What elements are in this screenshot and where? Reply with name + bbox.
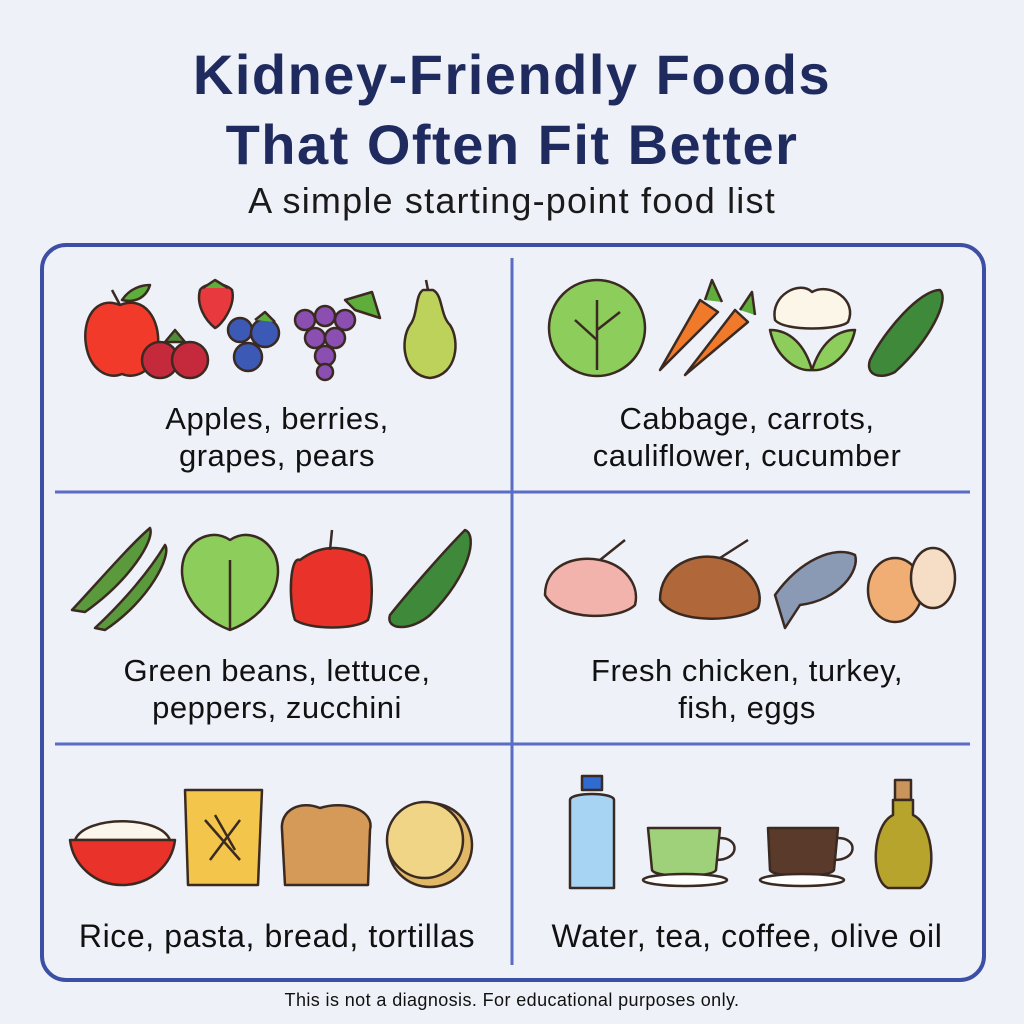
label: vegetables 1: cauliflower, cucumber bbox=[593, 438, 901, 473]
icon: drinks bbox=[568, 774, 933, 890]
icon: vegetables 1 bbox=[548, 278, 944, 378]
title: Kidney-Friendly Foods bbox=[193, 43, 831, 106]
subtitle: A simple starting-point food list bbox=[248, 180, 776, 221]
label: proteins: Fresh chicken, turkey, bbox=[591, 653, 903, 688]
title: That Often Fit Better bbox=[226, 113, 798, 176]
icon: vegetables 2 bbox=[70, 526, 472, 632]
title bbox=[193, 43, 831, 176]
label: vegetables 1: Cabbage, carrots, bbox=[620, 401, 874, 436]
label: fruits bbox=[165, 401, 389, 473]
label: proteins: fish, eggs bbox=[678, 690, 816, 725]
footer disclaimer: This is not a diagnosis. For educational purposes only. bbox=[285, 990, 739, 1010]
icon: fruits bbox=[84, 278, 457, 382]
label: vegetables 1 bbox=[593, 401, 901, 473]
label: drinks: Water, tea, coffee, olive oil bbox=[552, 918, 942, 954]
label: vegetables 2 bbox=[124, 653, 430, 725]
label: fruits: Apples, berries, bbox=[165, 401, 389, 436]
panel frame bbox=[40, 243, 986, 982]
label: fruits: grapes, pears bbox=[179, 438, 375, 473]
label: proteins bbox=[591, 653, 903, 725]
icon: proteins bbox=[544, 539, 956, 630]
label: vegetables 2: Green beans, lettuce, bbox=[124, 653, 430, 688]
icon: grains bbox=[68, 788, 474, 888]
label: grains: Rice, pasta, bread, tortillas bbox=[79, 918, 475, 954]
label: vegetables 2: peppers, zucchini bbox=[152, 690, 402, 725]
